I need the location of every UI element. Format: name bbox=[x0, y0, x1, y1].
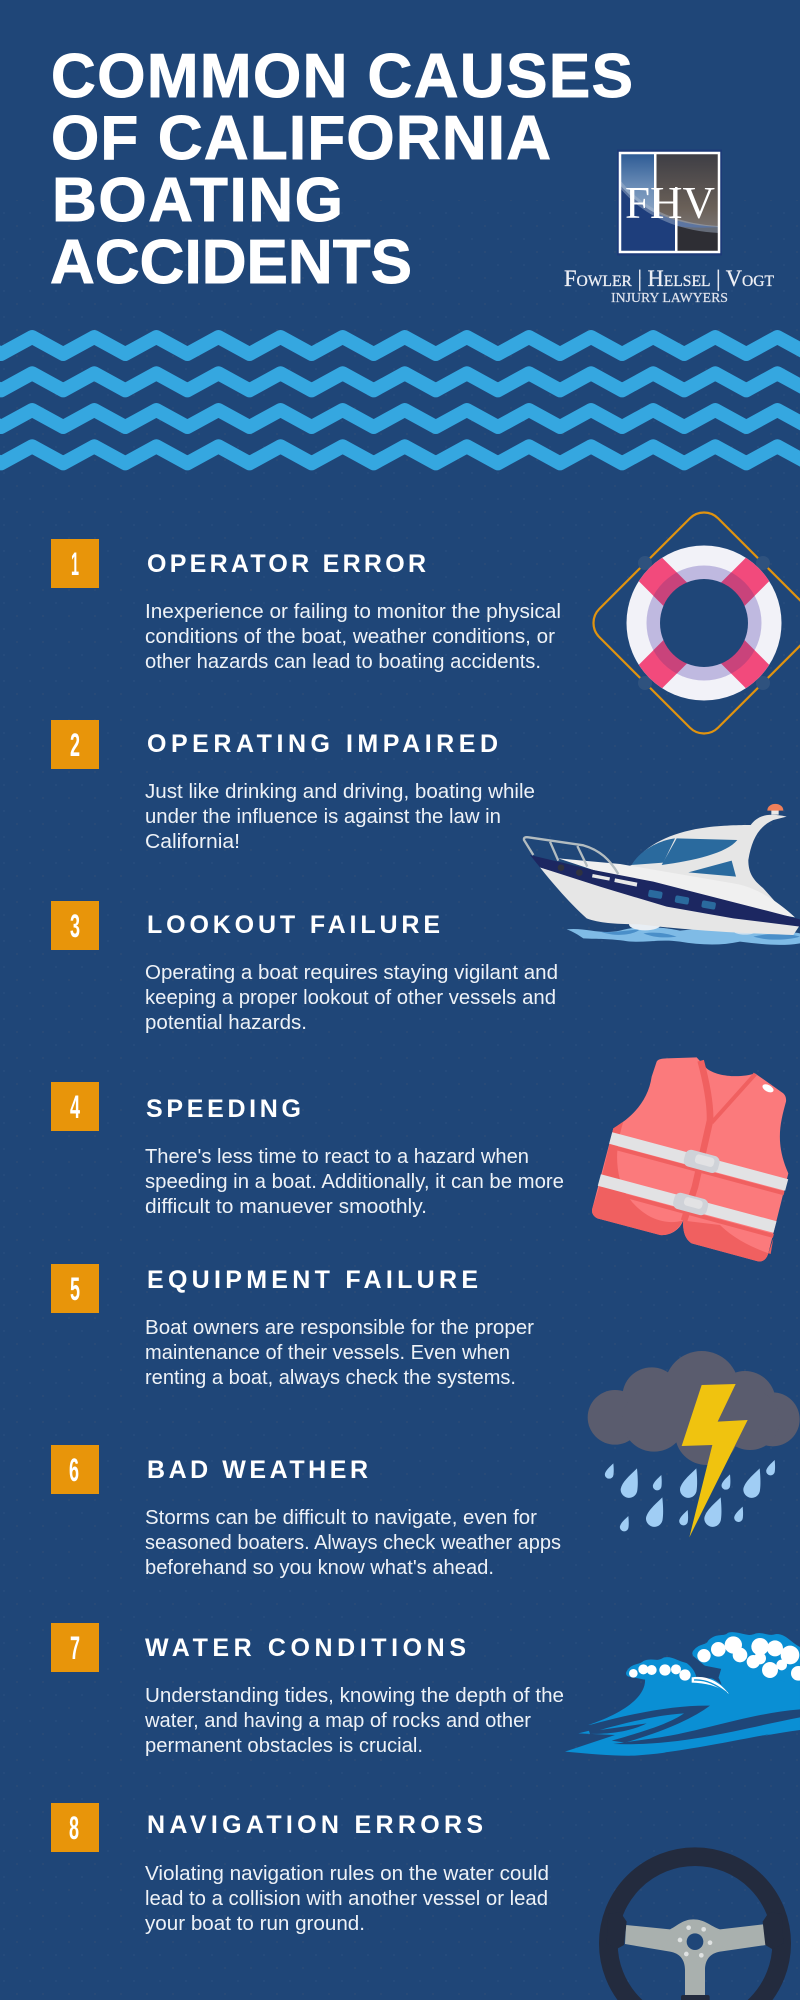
section 3: lookout failure bbox=[51, 901, 558, 1034]
straps bbox=[599, 1138, 787, 1227]
body 6 bbox=[145, 1507, 561, 1579]
icon: steering wheel bbox=[607, 1857, 783, 2000]
number badge 3: 3 bbox=[70, 908, 80, 944]
body 6: seasoned boaters. Always check weather apps bbox=[145, 1532, 561, 1554]
number badge 3 bbox=[51, 901, 99, 950]
logo: FHV emblem bbox=[617, 150, 722, 256]
number badge 7: 7 bbox=[70, 1630, 80, 1666]
section 4: speeding bbox=[51, 1082, 564, 1218]
body 5: renting a boat, always check the systems. bbox=[145, 1367, 516, 1389]
title: BOATING bbox=[52, 166, 343, 235]
buckles bbox=[672, 1148, 721, 1217]
body 4: speeding in a boat. Additionally, it can be more bbox=[145, 1171, 564, 1193]
title: OF CALIFORNIA bbox=[51, 104, 551, 173]
body 8: lead to a collision with another vessel or lead bbox=[145, 1888, 548, 1910]
water under the yacht bbox=[567, 918, 800, 945]
logo: firm name bbox=[564, 266, 774, 306]
hull bbox=[540, 867, 800, 935]
number badge 4 bbox=[51, 1082, 99, 1131]
section 7: water conditions bbox=[51, 1623, 564, 1757]
beacon light bbox=[767, 804, 783, 815]
heading 4: SPEEDING bbox=[146, 1095, 301, 1123]
waves bbox=[0, 337, 800, 463]
number badge 7 bbox=[51, 1623, 99, 1672]
body 4 bbox=[145, 1146, 564, 1218]
wave body bbox=[565, 1662, 800, 1756]
grips bbox=[607, 1913, 783, 2000]
heading 8: NAVIGATION ERRORS bbox=[147, 1811, 483, 1839]
foam bbox=[629, 1636, 800, 1681]
body 2 bbox=[145, 781, 535, 853]
body 7 bbox=[144, 1685, 564, 1757]
number badge 6 bbox=[51, 1445, 99, 1494]
heading 7: WATER CONDITIONS bbox=[145, 1634, 466, 1662]
strap shadows bbox=[599, 1147, 784, 1236]
spokes bbox=[625, 1919, 766, 1996]
icon: motor yacht bbox=[524, 804, 800, 945]
arch and cabin bbox=[620, 815, 787, 903]
body 2: Just like drinking and driving, boating while bbox=[145, 781, 535, 803]
rain drops bbox=[605, 1460, 775, 1531]
body 7: permanent obstacles is crucial. bbox=[145, 1735, 423, 1757]
body 3 bbox=[145, 962, 558, 1034]
number badge 2 bbox=[51, 720, 99, 769]
dark wave lines bbox=[587, 1706, 800, 1753]
number badge 4: 4 bbox=[70, 1089, 80, 1125]
wheel rim bbox=[608, 1857, 782, 2000]
notch of deep water bbox=[697, 1665, 722, 1685]
body 7: water, and having a map of rocks and other bbox=[144, 1710, 531, 1732]
vest shading bbox=[592, 1122, 773, 1261]
number badge 1 bbox=[51, 539, 99, 588]
number badge 5: 5 bbox=[70, 1271, 80, 1307]
body 4: difficult to manuever smoothly. bbox=[145, 1196, 427, 1218]
tag bbox=[761, 1083, 775, 1094]
heading 3: LOOKOUT FAILURE bbox=[147, 911, 440, 939]
section 2: operating impaired bbox=[51, 720, 535, 853]
heading 2: OPERATING IMPAIRED bbox=[147, 730, 498, 758]
body 3: potential hazards. bbox=[145, 1012, 307, 1034]
body 1: other hazards can lead to boating accidents. bbox=[145, 651, 541, 673]
body 4: There's less time to react to a hazard when bbox=[145, 1146, 529, 1168]
number badge 8 bbox=[51, 1803, 99, 1852]
section 1: operator error bbox=[51, 539, 561, 673]
lightning bolt bbox=[682, 1384, 748, 1537]
body 3: keeping a proper lookout of other vessels and bbox=[145, 987, 556, 1009]
cabin windows bbox=[632, 838, 737, 877]
number badge 6: 6 bbox=[69, 1452, 79, 1488]
number badge 8: 8 bbox=[69, 1810, 79, 1846]
section 5: equipment failure bbox=[51, 1264, 534, 1389]
body 5: maintenance of their vessels. Even when bbox=[145, 1342, 510, 1364]
heading 1: OPERATOR ERROR bbox=[147, 550, 426, 578]
body 6: Storms can be difficult to navigate, even for bbox=[145, 1507, 537, 1529]
upper deck bbox=[558, 858, 795, 917]
body 5 bbox=[145, 1317, 534, 1389]
centre seams bbox=[684, 1061, 755, 1221]
icon: life vest bbox=[592, 1057, 788, 1261]
bolts bbox=[678, 1925, 712, 1958]
body 1: Inexperience or failing to monitor the physical bbox=[145, 601, 561, 623]
icon: storm cloud with lightning bbox=[588, 1351, 800, 1537]
hub hole bbox=[687, 1933, 703, 1950]
icon: cresting wave bbox=[565, 1636, 800, 1756]
icon: life ring bbox=[585, 504, 800, 742]
title bbox=[50, 42, 633, 297]
small foam crest outline bbox=[629, 1660, 693, 1681]
cloud bbox=[588, 1351, 800, 1465]
railing bbox=[524, 837, 618, 874]
number badge 2: 2 bbox=[70, 727, 80, 763]
heading 6: BAD WEATHER bbox=[147, 1456, 368, 1484]
logo: firm name: Fowler | Helsel | Vogt bbox=[564, 266, 774, 291]
body 2: California! bbox=[145, 831, 240, 853]
body 5: Boat owners are responsible for the proper bbox=[145, 1317, 534, 1339]
body 2: under the influence is against the law in bbox=[145, 806, 501, 828]
heading 5: EQUIPMENT FAILURE bbox=[147, 1266, 478, 1294]
title: COMMON CAUSES bbox=[51, 42, 633, 111]
body 1 bbox=[145, 601, 561, 673]
section 8: navigation errors bbox=[51, 1803, 549, 1935]
body 8: your boat to run ground. bbox=[145, 1913, 365, 1935]
body 8 bbox=[145, 1863, 549, 1935]
number badge 5 bbox=[51, 1264, 99, 1313]
body 8: Violating navigation rules on the water could bbox=[145, 1863, 549, 1885]
body 3: Operating a boat requires staying vigilant and bbox=[145, 962, 558, 984]
body 1: conditions of the boat, weather conditions, or bbox=[145, 626, 555, 648]
title: ACCIDENTS bbox=[50, 228, 412, 297]
navy stripe bbox=[530, 855, 800, 927]
section 6: bad weather bbox=[51, 1445, 561, 1579]
foam streaks bbox=[692, 1677, 729, 1694]
body 7: Understanding tides, knowing the depth of the bbox=[145, 1685, 564, 1707]
logo: firm name: INJURY LAWYERS bbox=[611, 291, 728, 306]
hull details bbox=[558, 864, 716, 910]
number badge 1: 1 bbox=[71, 546, 79, 582]
large foam crest outline bbox=[697, 1636, 800, 1680]
logo: FHV emblem: FHV bbox=[625, 177, 715, 228]
body 6: beforehand so you know what's ahead. bbox=[145, 1557, 494, 1579]
